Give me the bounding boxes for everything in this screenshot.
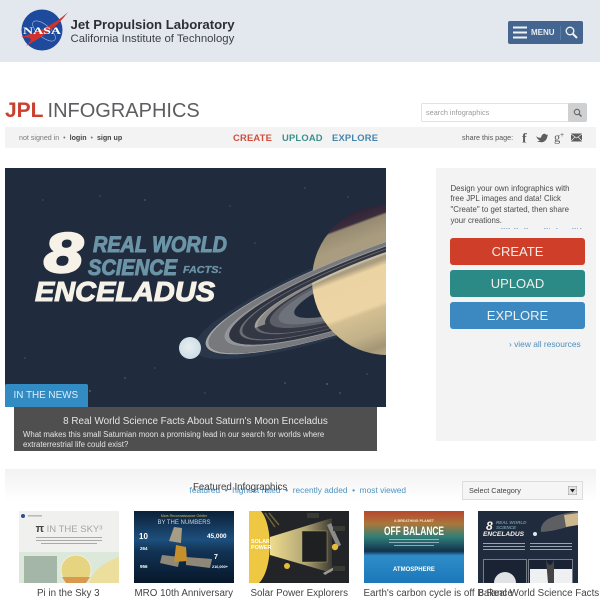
caption: Pi in the Sky 3: Pi in the Sky 3 (37, 588, 100, 599)
text: ENCELADUS: ENCELADUS (35, 276, 215, 307)
thumbnail: MRO 10th Anniversary: BY THE NUMBERS (157, 520, 211, 526)
caption panel (14, 407, 377, 451)
icon: NASA logo: NASA (23, 27, 61, 37)
thumbnail: Earth's carbon cycle: A BREATHING PLANET (394, 519, 435, 523)
text: California Institute of Technology: California Institute of Technology (70, 33, 234, 45)
menu button (508, 21, 583, 44)
thumbnail: Solar Power Explorers (249, 511, 349, 583)
hero: Enceladus image (5, 168, 386, 407)
icon: NASA logo (21, 10, 68, 50)
icon: search (560, 26, 578, 40)
search input: search infographics (426, 108, 489, 117)
planet rings: back (197, 268, 338, 359)
thumbnail: MRO 10th Anniversary (134, 511, 234, 583)
thumbnail: 8 Real World Science Facts: 8 (486, 519, 493, 533)
link: EXPLORE: EXPLORE (332, 132, 378, 143)
heading: Jet Propulsion Laboratory: Jet Propulsion Laboratory (70, 17, 235, 32)
thumbnail: MRO 10th Anniversary: 45,000 (207, 533, 227, 540)
thumbnail: Earth's carbon cycle (364, 511, 464, 583)
thumbnail: MRO 10th Anniversary: 264 (140, 546, 148, 551)
button: CREATE: CREATE (492, 244, 543, 259)
thumbnail: 8 Real World Science Facts (478, 511, 578, 583)
planet: Saturn (312, 205, 386, 355)
icon: hamburger (513, 26, 527, 38)
thumbnail: Pi in the Sky 3 (19, 511, 119, 583)
button: UPLOAD (450, 270, 585, 297)
thumbnail: MRO 10th Anniversary: 956 (140, 564, 148, 569)
filter band (5, 469, 596, 501)
thumbnail: 8 Real World Science Facts: ENCELADUS (483, 531, 525, 538)
button: CREATE (450, 238, 585, 265)
thumbnail: 8 Real World Science Facts: SCIENCE (496, 525, 517, 530)
thumbnail: MRO 10th Anniversary: Mars Reconnaissance Orbiter (161, 514, 208, 518)
caption: Solar Power Explorers: Solar Power Explorers (250, 588, 348, 599)
text: FACTS: FACTS: (183, 265, 222, 276)
button: EXPLORE (450, 302, 585, 329)
filter links: featured • highest rated • recently added • most viewed (190, 485, 406, 495)
category select (462, 481, 583, 500)
search box (421, 103, 587, 122)
thumbnail: Earth's carbon cycle: OFF BALANCE (384, 526, 444, 538)
search input (421, 103, 569, 122)
thumbnail: 8 Real World Science Facts: REAL WORLD (496, 520, 527, 525)
sidebar intro text (450, 184, 570, 225)
link: view all resources: › view all resources (509, 339, 581, 349)
thumbnail: Solar Power Explorers: POWER (251, 545, 271, 551)
caption: 8 Real World Science Facts: 8 Real World Science Facts (478, 588, 599, 599)
caption: MRO 10th Anniversary: MRO 10th Anniversary (134, 588, 233, 599)
label: in the news: IN THE NEWS (14, 390, 78, 401)
social icons (522, 130, 582, 145)
thumbnail: MRO 10th Anniversary: 216,000+ (212, 565, 229, 569)
sidebar intro text: your creations. (450, 216, 502, 225)
text: MENU: MENU (531, 28, 555, 37)
caption text: extraterrestrial life could exist? (23, 440, 128, 449)
social icons: + (560, 132, 564, 139)
button: EXPLORE: EXPLORE (487, 308, 548, 323)
social icons: g (554, 130, 561, 144)
panel: sidebar (436, 168, 596, 441)
icon: dropdown arrow (568, 486, 577, 495)
text: share this page: share this page: (462, 133, 513, 142)
thumbnail: MRO 10th Anniversary: 7 (214, 554, 218, 561)
button: UPLOAD: UPLOAD (491, 276, 544, 291)
sidebar intro text: "Create" to get started, then share (450, 205, 569, 214)
link: UPLOAD: UPLOAD (282, 132, 323, 143)
thumbnail: Solar Power Explorers: SOLAR (251, 539, 270, 545)
hero title (35, 221, 227, 307)
sidebar intro text: free JPL images and data! Click (450, 194, 561, 203)
stars (24, 188, 368, 394)
caption text: What makes this small Saturnian moon a promising lead in our search for worlds where (23, 430, 324, 439)
text: REAL WORLD: REAL WORLD (93, 232, 227, 257)
numeral 8: 8 (44, 221, 84, 284)
sign-in links: not signed in • login • sign up (19, 134, 122, 142)
text: SCIENCE: SCIENCE (88, 255, 178, 280)
thumbnail: Earth's carbon cycle: ATMOSPHERE (393, 567, 435, 573)
logo: JPL Infographics: JPLINFOGRAPHICS (5, 99, 200, 122)
label: in the news (5, 384, 88, 407)
sidebar intro text: Design your own infographics with (450, 184, 570, 192)
caption: Earth's carbon cycle: Earth's carbon cycle is off Balance (364, 588, 513, 599)
caption text (23, 430, 324, 449)
category select: Select Category (469, 486, 521, 495)
toolbar (5, 127, 596, 148)
moon: Enceladus (179, 337, 201, 359)
clipped link line (501, 228, 582, 229)
caption title: 8 Real World Science Facts About Saturn's Moon Enceladus (63, 416, 328, 427)
heading: Featured Infographics: Featured Infographics (193, 482, 287, 493)
thumbnail: Pi in the Sky 3: π IN THE SKY³ (36, 523, 102, 535)
thumbnail: MRO 10th Anniversary: 10 (139, 532, 148, 541)
planet rings: front (206, 242, 386, 346)
link: CREATE: CREATE (233, 132, 272, 143)
icon: search button (568, 103, 587, 122)
header band (0, 0, 600, 62)
